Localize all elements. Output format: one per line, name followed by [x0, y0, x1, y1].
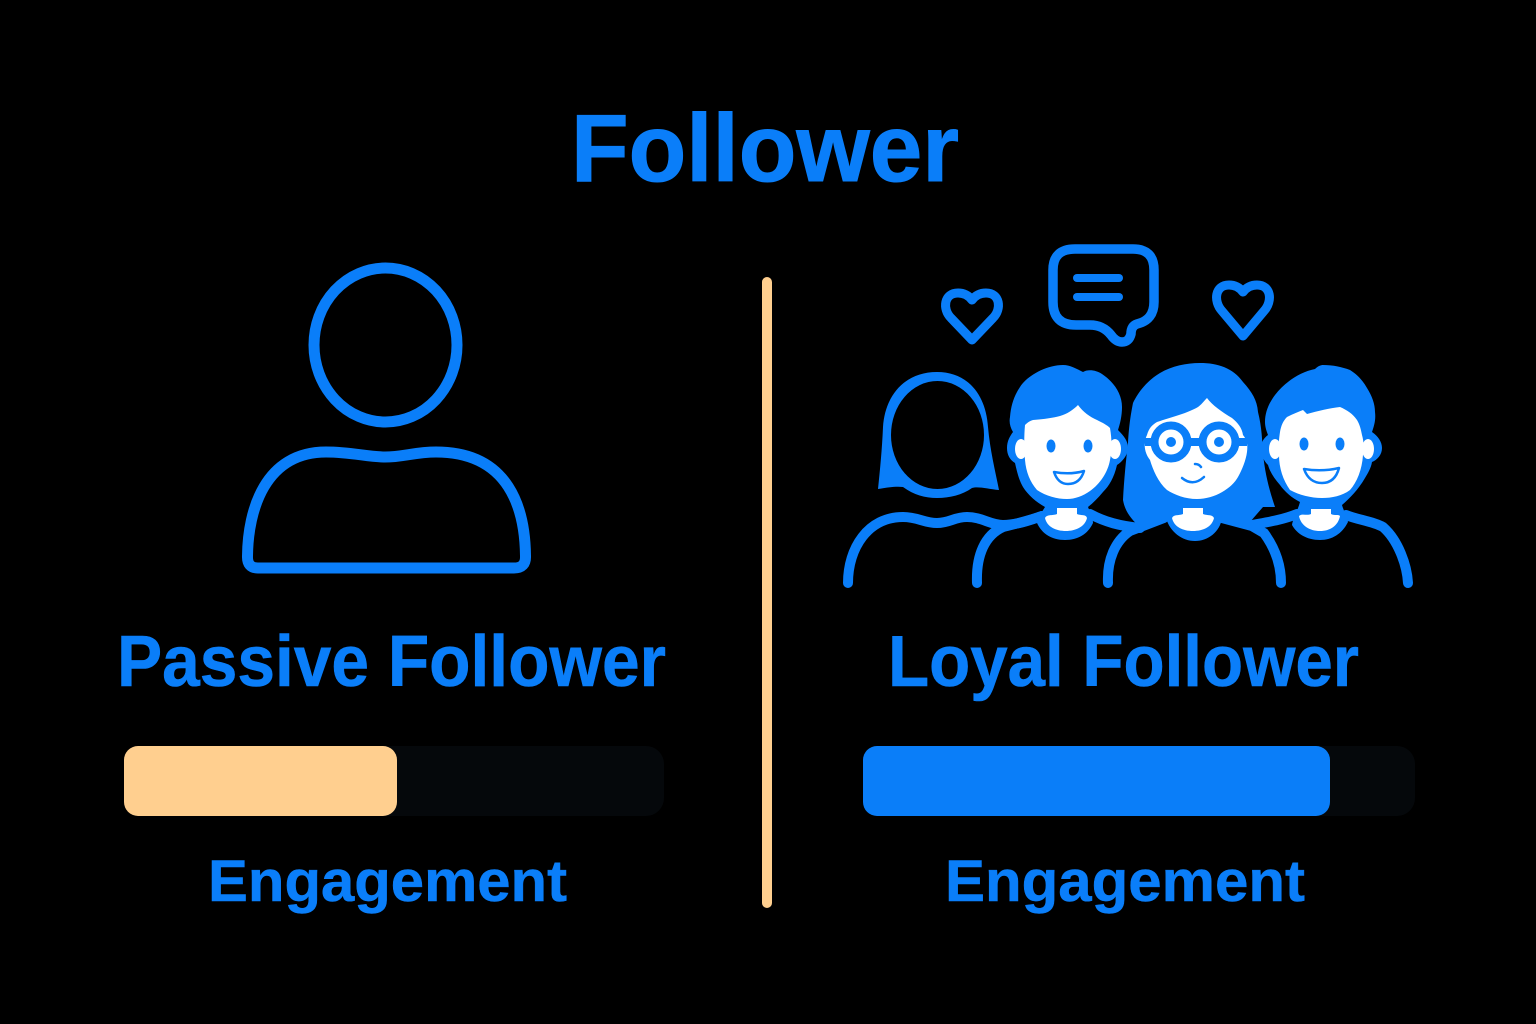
glasses: [1145, 426, 1247, 458]
icon: heart left: [946, 293, 998, 340]
icon: single person outline: [247, 268, 526, 568]
person 1: outline woman: [848, 372, 1042, 583]
person 4: smiling man: [1252, 365, 1408, 583]
divider: [762, 277, 772, 908]
person 3: woman with glasses: [1108, 363, 1281, 583]
icon: heart right: [1217, 285, 1269, 336]
heading: passive follower: Passive Follower: [117, 622, 666, 702]
engagement bar: loyal: [863, 746, 1415, 816]
engagement bar: passive: [124, 746, 664, 816]
heading: loyal follower: Loyal Follower: [888, 622, 1359, 702]
panel: passive follower: [117, 268, 666, 914]
panel: loyal follower: [848, 249, 1415, 914]
person 2: smiling man: [977, 365, 1140, 583]
title: Follower: [571, 95, 959, 202]
icon: speech bubble: [1053, 249, 1154, 342]
label: engagement loyal: Engagement: [945, 849, 1305, 914]
label: engagement passive: Engagement: [208, 849, 567, 914]
